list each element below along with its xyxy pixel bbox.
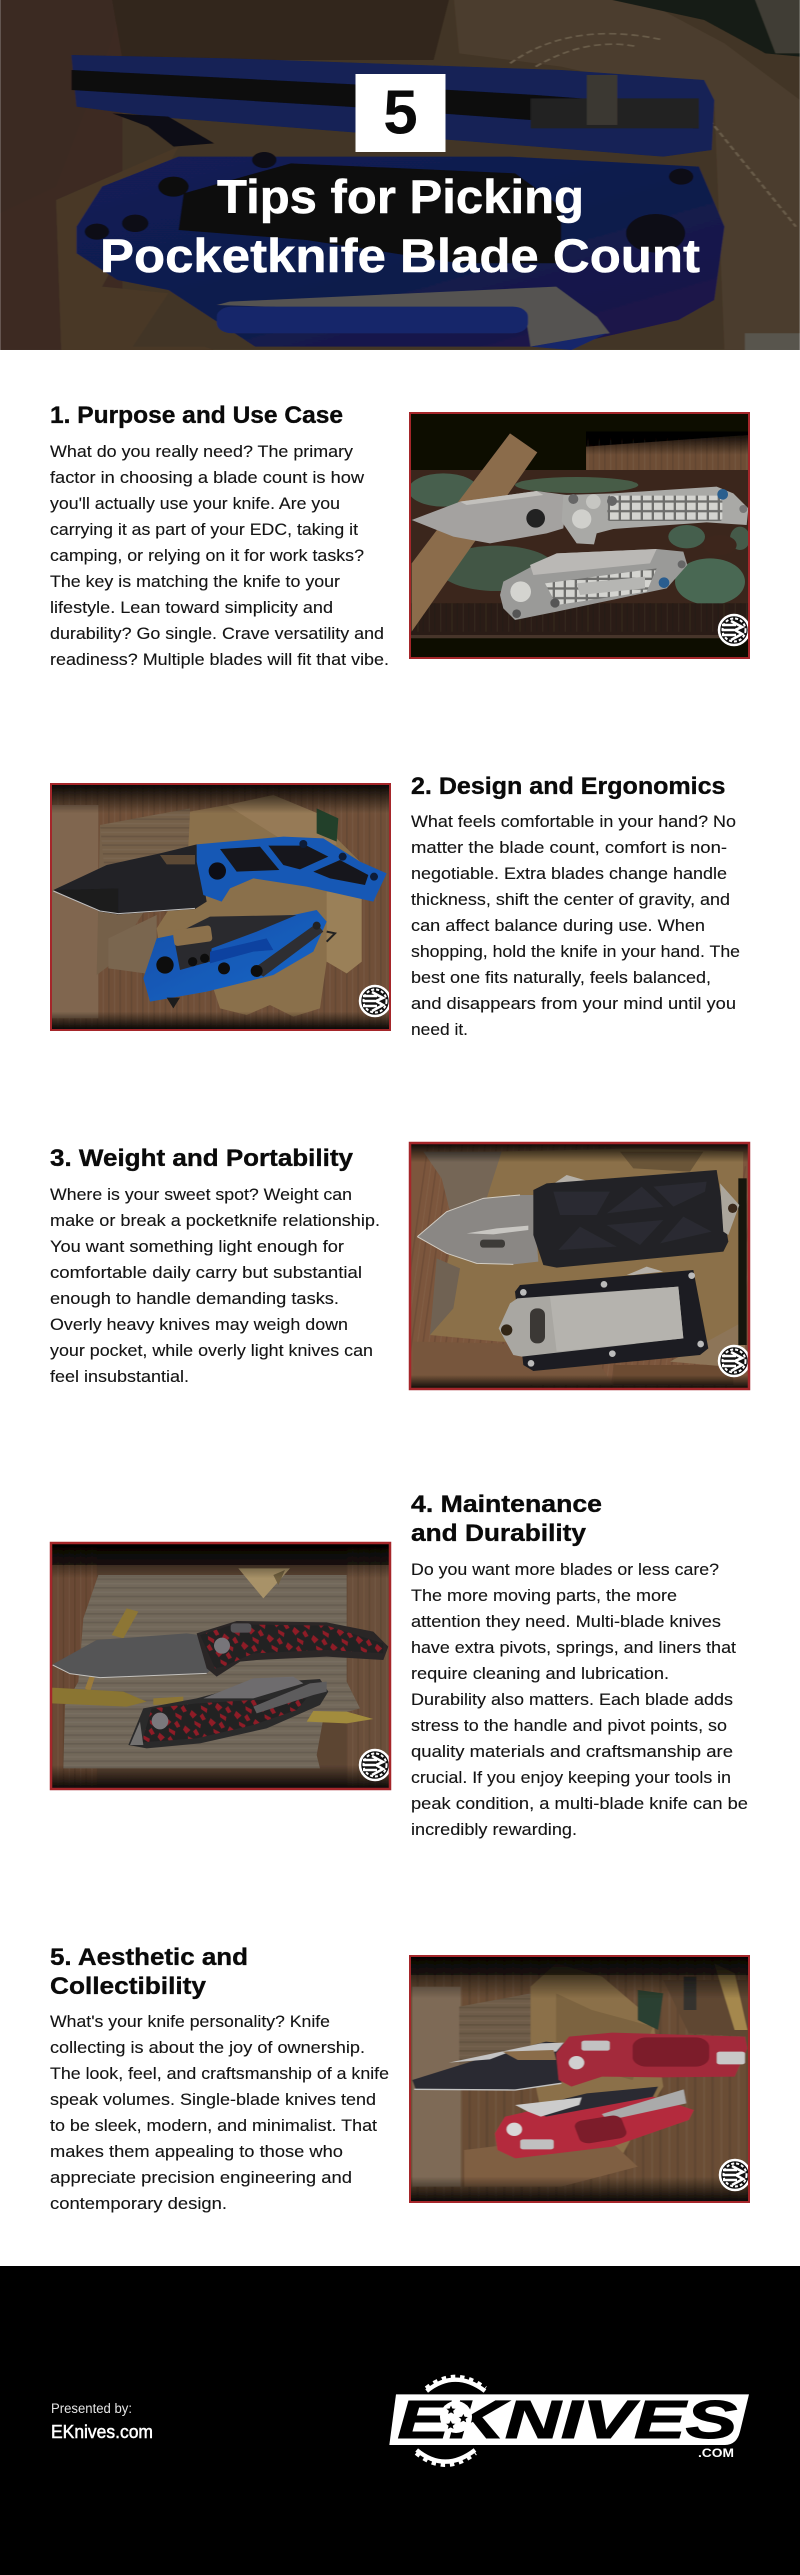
body text 3: your pocket, while overly light knives can — [50, 1341, 373, 1360]
body text 4: require cleaning and lubrication. — [411, 1664, 669, 1683]
heading 4: and Durability — [411, 1520, 587, 1547]
body text 4: incredibly rewarding. — [411, 1820, 577, 1839]
body text 2: What feels comfortable in your hand? No — [411, 812, 736, 831]
body text 4: peak condition, a multi-blade knife can be — [411, 1794, 748, 1813]
body text 4: Do you want more blades or less care? — [411, 1560, 719, 1579]
photo 2: blue knives on gloves — [51, 783, 390, 1030]
heading 2: 2. Design and Ergonomics — [411, 773, 726, 800]
section 5: aesthetic and collectibility — [50, 1944, 750, 2213]
body text 5: collecting is about the joy of ownership. — [50, 2038, 365, 2057]
body text 3: Overly heavy knives may weigh down — [50, 1315, 348, 1334]
body text 2 — [411, 812, 740, 1039]
body text 1: durability? Go single. Crave versatility and — [50, 624, 384, 643]
heading 5: 5. Aesthetic and — [50, 1944, 248, 1971]
body text 3: comfortable daily carry but substantial — [50, 1263, 362, 1282]
body text 4: crucial. If you enjoy keeping your tools in — [411, 1768, 731, 1787]
number badge — [356, 74, 446, 152]
body text 3: feel insubstantial. — [50, 1367, 189, 1386]
hero photo: blue pocketknives on gloves — [0, 0, 800, 350]
photo 1: silver knives on weathered wood — [408, 412, 750, 659]
title: Tips for Picking — [217, 170, 584, 223]
body text 1: What do you really need? The primary — [50, 442, 354, 461]
logo wordmark: EKNIVES — [397, 2391, 738, 2450]
body text 2: shopping, hold the knife in your hand. The — [411, 942, 740, 961]
section 2: design and ergonomics — [51, 773, 740, 1039]
body text 5: appreciate precision engineering and — [50, 2168, 352, 2187]
body text 1: lifestyle. Lean toward simplicity and — [50, 598, 333, 617]
body text 2: thickness, shift the center of gravity, and — [411, 890, 730, 909]
body text 3: Where is your sweet spot? Weight can — [50, 1185, 352, 1204]
hero banner — [0, 0, 800, 350]
EKnives logo — [389, 2378, 749, 2464]
body text 5: makes them appealing to those who — [50, 2142, 343, 2161]
heading 5: Collectibility — [50, 1973, 207, 2000]
body text 4: quality materials and craftsmanship are — [411, 1742, 733, 1761]
body text 3 — [50, 1185, 380, 1386]
body text 1: camping, or relying on it for work tasks? — [50, 546, 364, 565]
body text 1: you'll actually use your knife. Are you — [50, 494, 340, 513]
body text 5: The look, feel, and craftsmanship of a knife — [50, 2064, 389, 2083]
photo 4: red carbon knives with brass cartridges — [51, 1543, 390, 1790]
heading 1: 1. Purpose and Use Case — [50, 402, 343, 429]
body text 2: need it. — [411, 1020, 468, 1039]
section 4: maintenance and durability — [51, 1491, 748, 1839]
presented by text: EKnives.com — [51, 2421, 153, 2442]
title — [100, 170, 700, 282]
body text 3: You want something light enough for — [50, 1237, 345, 1256]
heading 5 — [50, 1944, 248, 2000]
body text 2: best one fits naturally, feels balanced, — [411, 968, 711, 987]
heading 4: 4. Maintenance — [411, 1491, 602, 1518]
body text 1: carrying it as part of your EDC, taking it — [50, 520, 358, 539]
body text 5: to be sleek, modern, and minimalist. That — [50, 2116, 377, 2135]
body text 2: can affect balance during use. When — [411, 916, 705, 935]
body text 1 — [50, 442, 389, 669]
photo 5: red knives on wood and gloves — [409, 1955, 750, 2203]
body text 4: The more moving parts, the more — [411, 1586, 677, 1605]
photo 3: black OTF knives on leather — [408, 1142, 750, 1390]
section 3: weight and portability — [50, 1142, 750, 1390]
body text 2: negotiable. Extra blades change handle — [411, 864, 727, 883]
logo stars — [440, 2401, 472, 2433]
body text 4 — [411, 1560, 748, 1839]
body text 1: The key is matching the knife to your — [50, 572, 340, 591]
body text 2: matter the blade count, comfort is non- — [411, 838, 727, 857]
title: Pocketknife Blade Count — [100, 229, 700, 282]
body text 4: Durability also matters. Each blade adds — [411, 1690, 733, 1709]
footer — [0, 2266, 800, 2575]
presented by text: Presented by: — [51, 2401, 132, 2416]
body text 4: stress to the handle and pivot points, so — [411, 1716, 727, 1735]
footer background — [0, 2266, 800, 2575]
presented by text — [51, 2401, 153, 2442]
heading 3: 3. Weight and Portability — [50, 1145, 354, 1172]
logo gear arcs — [417, 2378, 485, 2464]
section 1: purpose and use case — [50, 402, 750, 669]
body text 1: readiness? Multiple blades will fit that vibe. — [50, 650, 389, 669]
body text 5: What's your knife personality? Knife — [50, 2012, 330, 2031]
body text 4: attention they need. Multi-blade knives — [411, 1612, 721, 1631]
body text 5 — [50, 2012, 389, 2213]
body text 3: enough to handle demanding tasks. — [50, 1289, 339, 1308]
body text 1: factor in choosing a blade count is how — [50, 468, 365, 487]
body text 2: and disappears from your mind until you — [411, 994, 736, 1013]
body text 3: make or break a pocketknife relationship. — [50, 1211, 380, 1230]
body text 5: contemporary design. — [50, 2194, 227, 2213]
logo .com: .COM — [698, 2446, 734, 2460]
body text 4: have extra pivots, springs, and liners that — [411, 1638, 736, 1657]
number badge: 5 — [383, 78, 418, 148]
body text 5: speak volumes. Single-blade knives tend — [50, 2090, 376, 2109]
logo banner — [389, 2394, 749, 2445]
heading 4 — [411, 1491, 602, 1547]
